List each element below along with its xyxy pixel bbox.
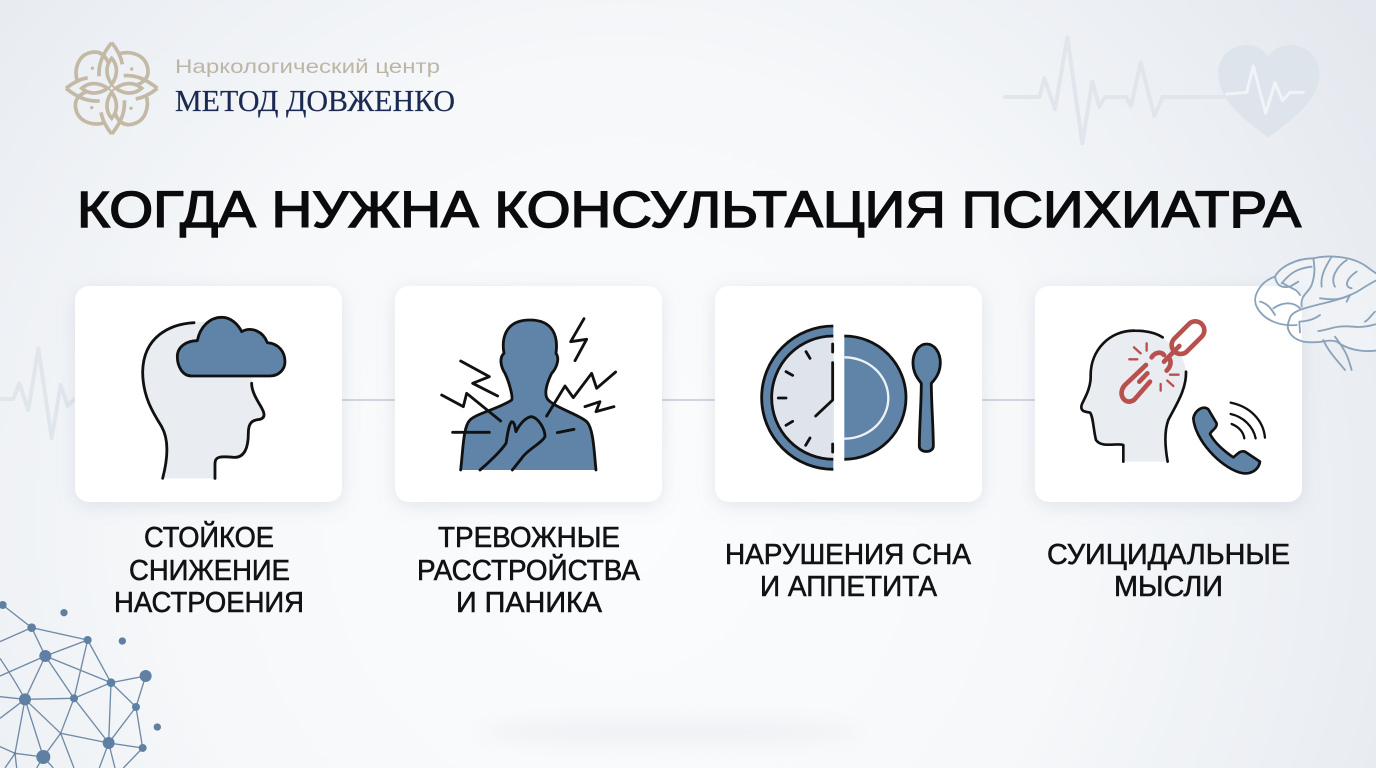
label: СУИЦИДАЛЬНЫЕ [1047, 539, 1290, 571]
card [715, 286, 982, 502]
label: И АППЕТИТА [760, 571, 938, 603]
icon: person with lightning [442, 319, 616, 470]
title: КОГДА НУЖНА КОНСУЛЬТАЦИЯ ПСИХИАТРА [77, 181, 1301, 238]
label: СНИЖЕНИЕ [129, 555, 290, 587]
label: СТОЙКОЕ [144, 520, 274, 554]
decoration: neural network [0, 601, 161, 768]
label: И ПАНИКА [456, 587, 603, 619]
connector lines [342, 399, 1035, 401]
panel: suicidal thoughts [1035, 286, 1302, 603]
card [1035, 286, 1302, 502]
icon: head with broken chain and phone [1081, 318, 1265, 473]
label: ТРЕВОЖНЫЕ [438, 522, 620, 554]
decoration: brain [1255, 256, 1376, 370]
card [75, 286, 342, 502]
label [1047, 539, 1290, 603]
logo [66, 43, 455, 134]
label [725, 539, 972, 603]
label: МЫСЛИ [1114, 571, 1223, 603]
label: НАСТРОЕНИЯ [114, 587, 304, 619]
panel: anxiety [395, 286, 662, 619]
label [417, 522, 641, 619]
logo subtitle: Наркологический центр [175, 56, 440, 78]
label [114, 520, 304, 619]
label: РАССТРОЙСТВА [417, 553, 641, 587]
panel: sleep and appetite [715, 286, 982, 603]
card [395, 286, 662, 502]
logo emblem [66, 43, 157, 134]
panel: low mood [75, 286, 342, 619]
icon: head with cloud [143, 317, 285, 478]
decoration: pulse and heart [1005, 37, 1319, 143]
decoration: left pulse [0, 348, 75, 438]
logo name: МЕТОД ДОВЖЕНКО [175, 83, 455, 118]
icon: clock and plate with spoon [762, 326, 940, 469]
label: НАРУШЕНИЯ СНА [725, 539, 972, 571]
